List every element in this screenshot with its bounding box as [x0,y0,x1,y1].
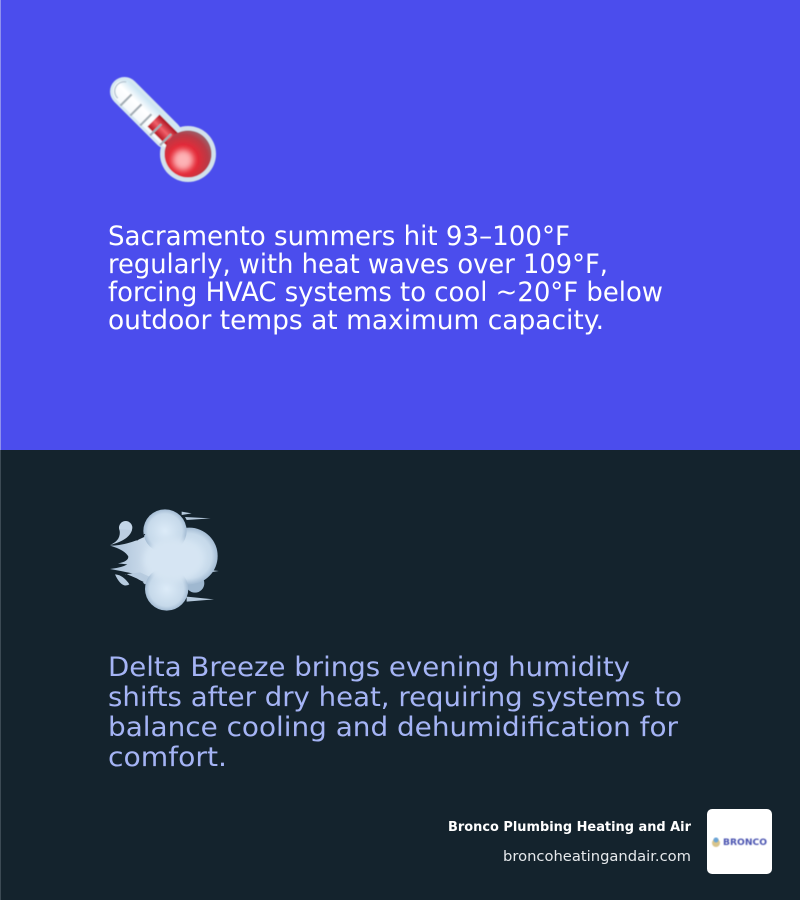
icon: wind cloud [110,509,219,611]
logo badge [707,809,772,874]
text: heat description [108,221,663,336]
company name: Bronco Plumbing Heating and Air [448,819,691,835]
text: heat description: Sacramento summers hit 93–100°F [108,221,570,252]
website url: broncoheatingandair.com [503,849,691,865]
text: breeze description: Delta Breeze brings evening humidity [108,652,630,683]
text: heat description: forcing HVAC systems to cool ~20°F below [108,277,663,308]
text: heat description: regularly, with heat waves over 109°F, [108,249,608,280]
text: breeze description: comfort. [108,742,227,773]
text: breeze description [108,652,682,773]
icon: thermometer [104,71,216,182]
logo badge: BRONCO [723,838,767,848]
text: heat description: outdoor temps at maximum capacity. [108,305,604,336]
text: breeze description: shifts after dry heat, requiring systems to [108,682,682,713]
text: breeze description: balance cooling and dehumidification for [108,712,678,743]
panel: breeze [0,450,800,900]
panel: heat [0,0,800,450]
